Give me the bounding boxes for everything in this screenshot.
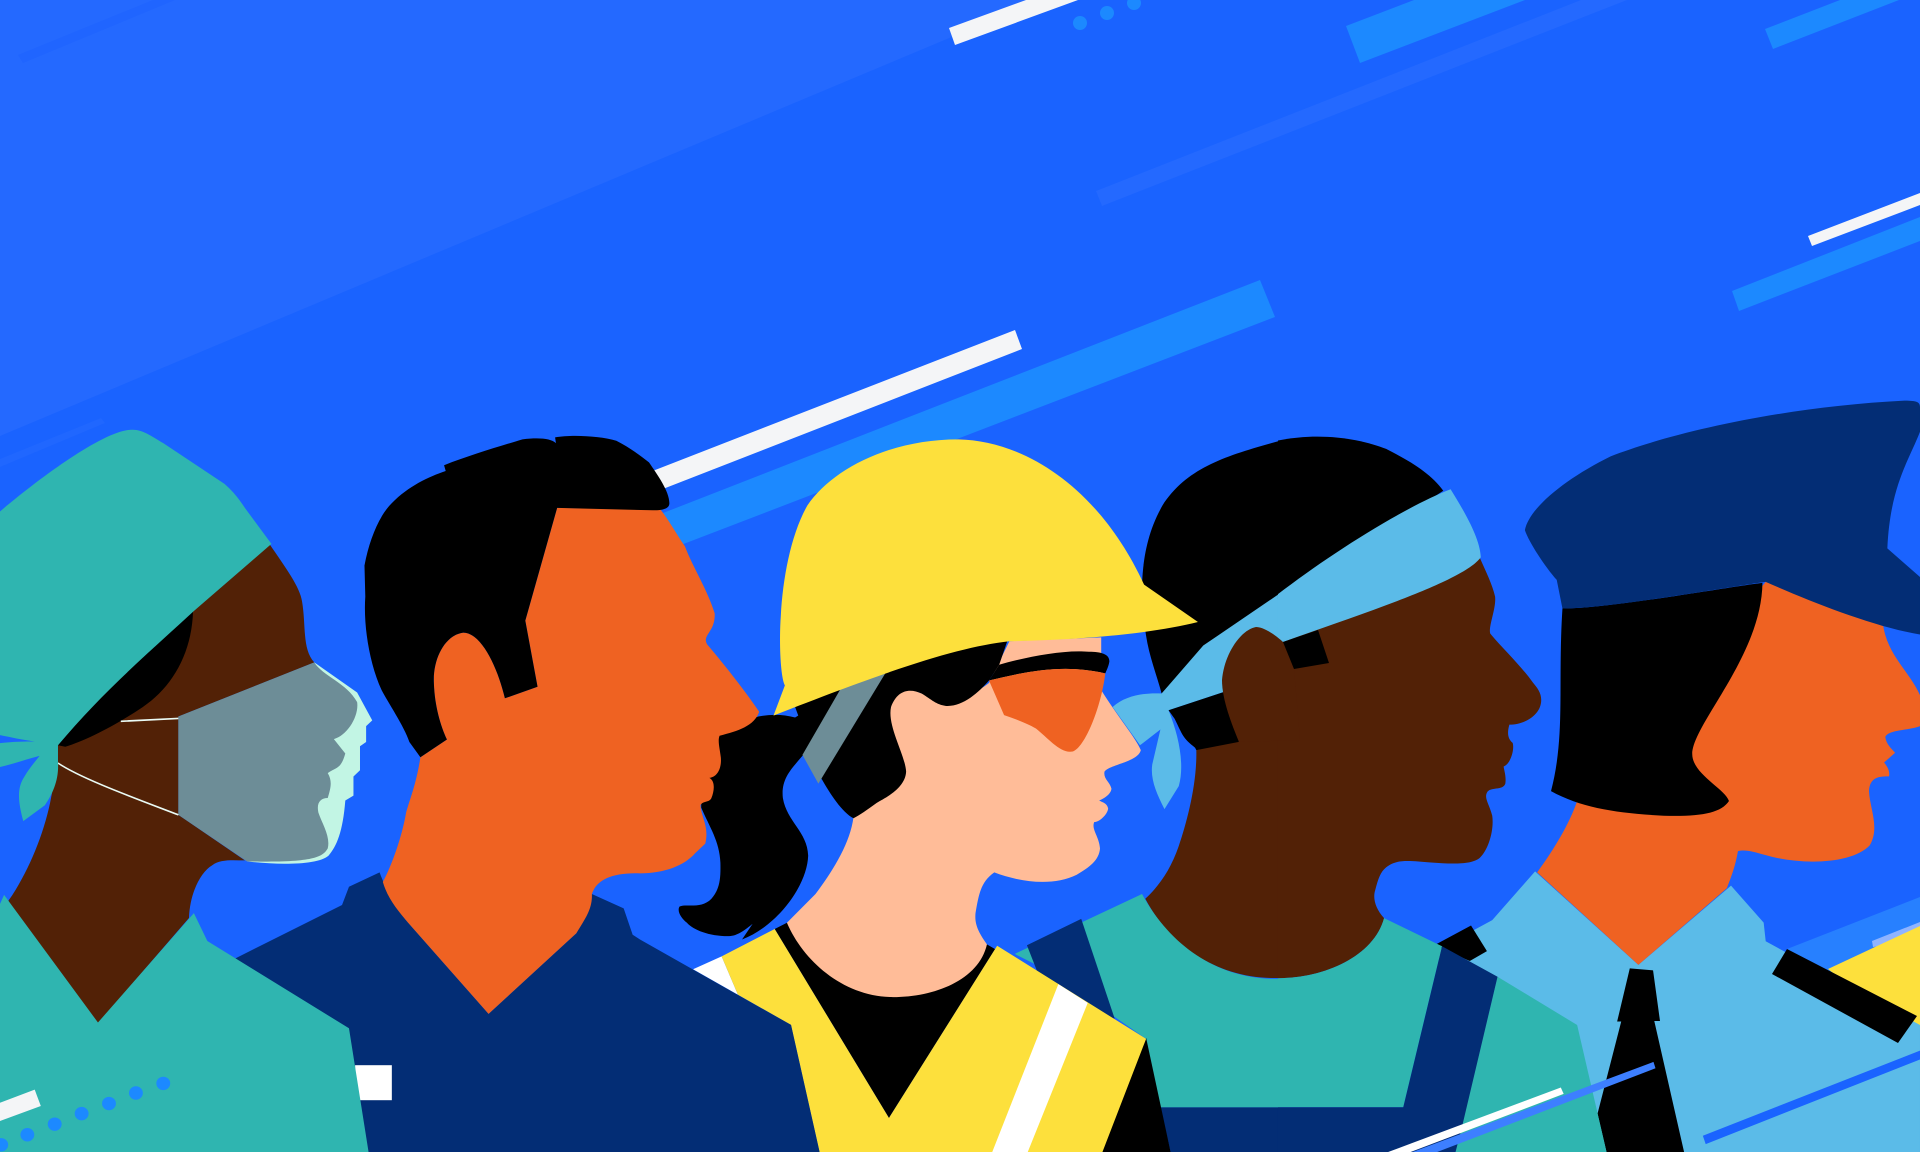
jacket pocket tag [355,1065,392,1100]
sideburn [1283,630,1329,669]
bandana knot [1113,593,1280,809]
hair [1142,441,1280,694]
bandana [1278,489,1481,644]
left shoulder strap [1434,926,1487,961]
foreground diagonal lines [1388,1062,1656,1152]
ponytail [679,688,844,940]
undershirt [775,923,995,1118]
mask ear straps [58,718,178,815]
scrubs [0,895,369,1152]
hair [795,635,1009,818]
vest left reflective stripe [693,956,738,995]
undershirt [1101,1038,1171,1152]
teal shirt [1278,918,1442,1107]
dotted line [0,1077,170,1152]
overalls [1160,1107,1280,1152]
face and neck [8,544,314,1023]
high-visibility vest [722,929,1146,1152]
figure: man in navy jacket [235,436,820,1152]
officer face [1537,582,1920,965]
white bar [0,1090,41,1122]
vest reflective stripe [992,984,1088,1152]
surgical cap [0,430,271,821]
surgical mask [178,662,357,862]
figure: officer with cap and tie [1434,401,1920,1152]
safety glasses lens [989,669,1105,752]
officer cap [1525,401,1920,635]
bandana worker ear and sideburn [1222,627,1329,742]
yellow helmet [773,439,1198,716]
figure: worker with bandana, right part [1278,437,1607,1152]
figure: nurse with surgical cap and mask [0,430,372,1152]
helmet strap [802,669,888,784]
line on shirt [1703,1051,1920,1144]
ear [1222,627,1300,742]
hair [364,436,669,757]
officer epaulette [1772,949,1917,1043]
face and neck [383,508,759,1014]
head and neck [1145,712,1280,978]
overall strap [1027,919,1115,1019]
neck and face [787,637,1141,997]
officer shirt [1435,871,1920,1152]
mask inner layer [247,662,372,864]
safety glasses frame [989,651,1109,681]
navy jacket [235,872,820,1152]
officer tie [1598,968,1684,1152]
teal shirt [1015,894,1280,1107]
figure: construction worker with helmet and vest [679,439,1198,1152]
sideburn [1169,673,1280,750]
head [1278,528,1541,978]
hair [58,611,193,747]
hair [1278,437,1443,599]
overalls [1278,946,1498,1152]
officer hair [1551,583,1762,816]
figure: worker with bandana, left part [1015,441,1280,1152]
